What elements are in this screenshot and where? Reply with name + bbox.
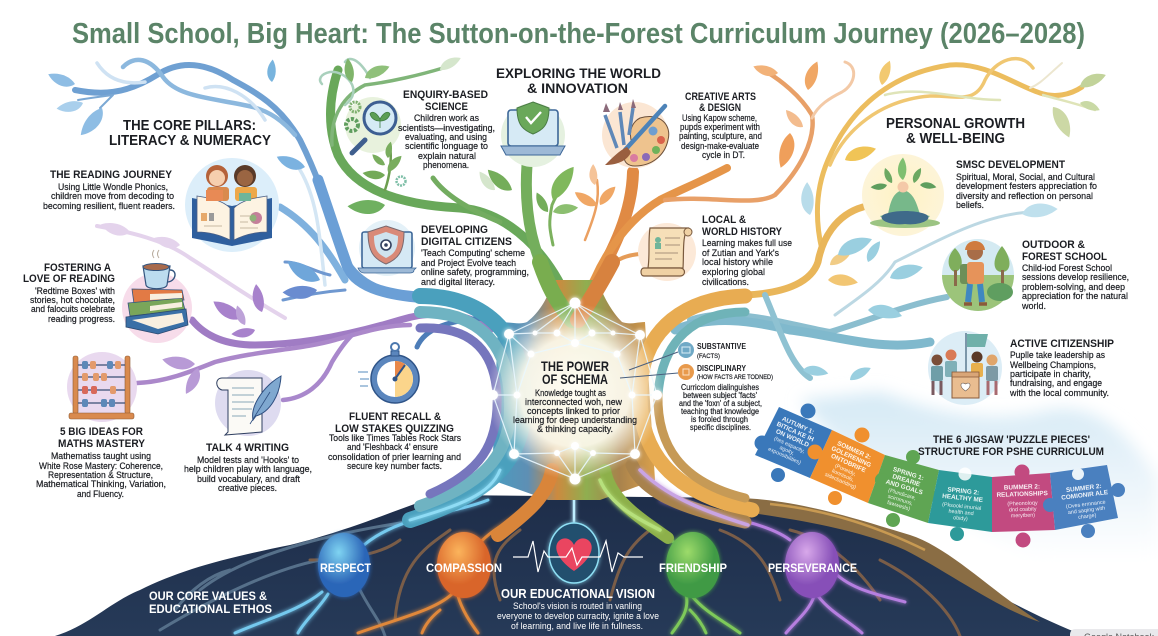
enquiry-based science text: scientific longuage to [405, 141, 488, 151]
puzzle piece 1: exponsibilities) [767, 446, 802, 466]
value: perseverance [768, 532, 857, 598]
icon: palette and brushes [602, 99, 669, 168]
personal growth heading: & WELL-BEING [906, 130, 1005, 147]
puzzle piece 5: BUMMER 2: [1004, 483, 1040, 492]
personal growth heading: PERSONAL GROWTH [886, 115, 1025, 132]
puzzle piece 5: dnd coabity [1009, 506, 1037, 513]
puzzle piece 4 [928, 468, 1007, 541]
puzzle piece 6 [1043, 465, 1125, 538]
active citizenship text: with the local community. [1009, 388, 1109, 398]
puzzle piece 1: ON WORLD [775, 428, 810, 449]
creative arts text: CREATIVE ARTS [685, 91, 756, 103]
talk 4 writing text: build vocabulary, and draft [197, 474, 300, 484]
puzzle piece 2 [808, 428, 889, 505]
schema text: Knowledge tought as [535, 388, 606, 398]
schema text: interconnected woh, new [525, 397, 622, 407]
fluent recall text: secure key number facts. [347, 461, 442, 471]
enquiry-based science text: Children work as [414, 113, 479, 123]
fluent recall text [328, 411, 461, 471]
creative arts text: Using Kapow scheme, [682, 113, 757, 123]
local and world history text [702, 214, 792, 287]
fluent recall text: consolidation of prier learning and [328, 452, 461, 462]
fluent recall text: Tools like Times Tables Rock Stars [329, 433, 461, 443]
fluent recall text: LOW STAKES QUIZZING [335, 423, 454, 435]
puzzle piece 6: charge) [1078, 513, 1097, 521]
branch: purple reading and writing [97, 220, 490, 400]
schema text: concepts linked to prior [527, 406, 620, 416]
enquiry-based science text: evaluating, and using [405, 132, 487, 142]
branch: green science and computing [320, 53, 579, 305]
knowledge types callout: and the 'foxn' of a subject, [679, 399, 762, 408]
icon: scroll and quill [215, 370, 281, 436]
icon: history scroll [638, 223, 696, 281]
puzzle piece 1: AUTUMY 1: [781, 416, 815, 436]
enquiry-based science text: SCIENCE [425, 101, 468, 113]
value: friendship [659, 532, 727, 598]
puzzle piece 5: (Pheonoloqy [1007, 500, 1038, 508]
puzzle piece 5: merytben) [1011, 513, 1035, 519]
schema text: OF SCHEMA [542, 371, 608, 387]
educational vision text: everyone to develop curracity, ignite a love [497, 611, 659, 621]
creative arts text [679, 91, 762, 160]
trunk [410, 262, 752, 538]
big ideas for maths text: Representation & Structure, [48, 470, 153, 480]
knowledge types callout: teaching that knowledge [681, 407, 759, 416]
active citizenship text: fundraising, and engage [1010, 378, 1102, 388]
active citizenship text: Puplle take leadership as [1010, 350, 1105, 360]
core values heading: EDUCATIONAL ETHOS [149, 602, 272, 616]
puzzle piece 2: (Poneidy, [834, 463, 857, 478]
outdoor forest school text: OUTDOOR & [1022, 239, 1085, 251]
puzzle piece 6: (Oves ermnance [1066, 499, 1106, 510]
talk 4 writing text [184, 442, 312, 493]
big ideas for maths text: White Rose Mastery: Coherence, [39, 461, 163, 471]
fostering a love of reading text: FOSTERING A [44, 262, 111, 274]
creative arts text: pupds experiment with [680, 122, 760, 132]
icon: meditating figure [862, 154, 944, 236]
puzzle piece 4: HEALTHY ME [942, 493, 984, 504]
educational vision text: of learning, and live life in fullness. [511, 621, 643, 631]
jigsaw heading [918, 434, 1104, 458]
puzzle piece 3: fawwesls) [886, 500, 911, 513]
puzzle piece 4: obidy) [953, 515, 968, 523]
active citizenship text: ACTIVE CITIZENSHIP [1010, 338, 1114, 350]
digital citizens text [421, 224, 529, 287]
icon: children with flag and box [928, 331, 1002, 405]
value: compassion [426, 532, 502, 598]
big ideas for maths text [36, 426, 166, 499]
value: respect: RESPECT [320, 561, 372, 575]
big ideas for maths text: MATHS MASTERY [58, 438, 146, 450]
knowledge types callout: (FACTS) [697, 353, 720, 360]
puzzle piece 3: (Plundicare, [887, 488, 917, 502]
icon: laptop with shield [501, 102, 565, 167]
reading journey text: Using Little Wondle Phonics, [58, 182, 168, 192]
fostering a love of reading text: 'Redtime Boxes' with [35, 286, 115, 296]
puzzle piece 1: agoity, [778, 445, 795, 457]
puzzle piece 1: (hes eapacity, [773, 436, 806, 455]
puzzle piece 3: SPRING 1: [892, 466, 925, 482]
knowledge types callout: DISCIPLINARY [697, 364, 747, 373]
big ideas for maths text: Mathematical Thinking, Variation, [36, 479, 166, 489]
jigsaw heading: STRUCTURE FOR PSHE CURRICULUM [918, 446, 1104, 458]
schema text: THE POWER [541, 358, 609, 374]
creative arts text: cycle in DT. [702, 150, 745, 160]
icon: magnifier with plant [345, 97, 406, 186]
puzzle piece 5: RELATIONSHIPS [996, 490, 1049, 499]
talk 4 writing text: creative pieces. [218, 483, 277, 493]
fostering a love of reading text: LOVE OF READING [23, 273, 115, 285]
puzzle piece 2: ONTOBRIFE [830, 453, 867, 475]
creative arts text: design-make-evaluate [681, 141, 759, 151]
educational vision text: OUR EDUCATIONAL VISION [501, 586, 655, 601]
fostering a love of reading text: reading progress. [48, 314, 115, 324]
digital citizens text: DEVELOPING [421, 224, 488, 236]
value: perseverance: PERSEVERANCE [768, 561, 857, 575]
big ideas for maths text: Mathematiss taught using [51, 451, 151, 461]
icon: cup and book stack [122, 250, 192, 343]
smsc development text: beliefs. [956, 200, 984, 210]
talk 4 writing text: Model tests and 'Hooks' to [197, 455, 299, 465]
value: compassion: COMPASSION [426, 561, 502, 575]
core pillars heading [109, 117, 271, 149]
branch: orange arts and history [572, 59, 854, 305]
enquiry-based science text [398, 89, 495, 170]
core values heading: OUR CORE VALUES & [149, 589, 267, 603]
big ideas for maths text: and Fluency. [77, 489, 124, 499]
local and world history text: Learning makes full use [702, 238, 792, 248]
smsc development text: SMSC DEVELOPMENT [956, 159, 1065, 171]
outdoor forest school text: appreciation for the natural [1022, 291, 1128, 301]
puzzle piece 4: SPRING 2: [947, 486, 980, 497]
exploring the world heading [496, 65, 661, 96]
talk 4 writing text: help children play with language, [184, 464, 312, 474]
educational vision text: School's vision is routed in vanling [513, 601, 642, 611]
local and world history text: WORLD HISTORY [702, 226, 783, 238]
jigsaw heading: THE 6 JIGSAW 'PUZZLE PIECES' [933, 434, 1090, 446]
digital citizens text: DIGITAL CITIZENS [421, 236, 512, 248]
local and world history text: local history while [702, 257, 773, 267]
digital citizens text: 'Teach Computing' scheme [421, 248, 525, 258]
puzzle piece 1 [754, 404, 832, 482]
core pillars heading: LITERACY & NUMERACY [109, 132, 271, 149]
value: respect [318, 533, 372, 597]
enquiry-based science text: explain natural [418, 151, 476, 161]
fluent recall text: and 'Fleshback 4' ensure [347, 442, 438, 452]
branch: stopwatch link [417, 318, 485, 347]
creative arts text: & DESIGN [699, 102, 741, 114]
icon: heartbeat heart [513, 523, 643, 583]
local and world history text: LOCAL & [702, 214, 746, 226]
icon: child hiking in forest [942, 239, 1014, 311]
knowledge types callout [620, 342, 773, 432]
puzzle piece 3: AND GOALS [885, 479, 924, 497]
reading journey text: THE READING JOURNEY [50, 169, 173, 181]
puzzle piece 6: SUMMER 2: [1066, 483, 1102, 494]
fostering a love of reading text [23, 262, 115, 324]
schema text: & thinking capacity. [537, 424, 613, 434]
digital citizens text: online safety, programming, [421, 267, 529, 277]
ground and roots [55, 485, 1085, 636]
enquiry-based science text: ENQUIRY-BASED [403, 89, 488, 101]
sky wash behind puzzle [800, 392, 1158, 560]
outdoor forest school text: problem-solving, and deep [1022, 282, 1125, 292]
smsc development text: Spiritual, Moral, Social, and Cultural [956, 172, 1095, 182]
core pillars heading: THE CORE PILLARS: [123, 117, 256, 134]
fostering a love of reading text: stories, hot chocolate, [30, 295, 115, 305]
branch: gold personal growth [745, 59, 1108, 295]
local and world history text: of Zutian and Yark's [702, 248, 779, 258]
puzzle piece 3: DREARIE [891, 473, 922, 489]
puzzle piece 2: lionnisols, [831, 468, 855, 484]
icon: laptop with lock shield [358, 220, 416, 276]
knowledge types callout: specific disciplines. [690, 423, 751, 432]
schema network [487, 298, 663, 484]
branch: blue literacy and numeracy [46, 59, 430, 300]
icon: abacus [67, 352, 137, 422]
enquiry-based science text: phenomena. [423, 160, 469, 170]
puzzle piece 2: sidecbarlding) [824, 472, 857, 491]
smsc development text: development festers appreciation fo [956, 181, 1097, 191]
knowledge types callout: Curricclom dialinguishes [681, 383, 759, 392]
schema text [513, 358, 637, 434]
outdoor forest school text: FOREST SCHOOL [1022, 251, 1107, 263]
digital citizens text: and Project Evolve teach [421, 258, 516, 268]
value: friendship: FRIENDSHIP [659, 561, 727, 575]
enquiry-based science text: scientists—investigating, [398, 123, 495, 133]
exploring the world heading: EXPLORING THE WORLD [496, 65, 661, 81]
knowledge types callout: SUBSTANTIVE [697, 342, 747, 351]
talk 4 writing text: TALK 4 WRITING [206, 442, 289, 454]
knowledge types callout: (HOW FACTS ARE TODNED) [697, 374, 773, 381]
schema text: learning for deep understanding [513, 415, 637, 425]
puzzle piece 5 [992, 464, 1055, 548]
smsc development text [956, 159, 1097, 210]
creative arts text: painting, sculpture, and [679, 131, 762, 141]
icon: stopwatch [358, 343, 419, 403]
local and world history text: exploring global [702, 267, 765, 277]
puzzle piece 6: COMIONIR ALE [1061, 489, 1109, 502]
puzzle piece 3: scirnmuns, [887, 494, 914, 507]
active citizenship text [1009, 338, 1114, 398]
branch: teal outdoor and citizenship [675, 182, 1058, 383]
personal growth heading [886, 115, 1025, 147]
outdoor forest school text: Child-iod Forest School [1022, 263, 1112, 273]
core values heading [149, 589, 272, 616]
knowledge types callout: is foroled through [691, 415, 748, 424]
puzzle piece 2: SOMMER 2: [836, 440, 872, 461]
local and world history text: civilications. [702, 277, 749, 287]
puzzle piece 4: (Pksookl imunial [942, 502, 981, 512]
active citizenship text: Wellbeing Champions, [1010, 360, 1096, 370]
outdoor forest school text [1021, 239, 1129, 311]
reading journey text: children move from decoding to [51, 191, 174, 201]
puzzle piece 4: health and [948, 509, 974, 517]
jigsaw puzzle pieces [754, 404, 1125, 548]
educational vision text [497, 586, 659, 631]
digital citizens text: and digital literacy. [421, 277, 495, 287]
reading journey text [43, 169, 175, 211]
fluent recall text: FLUENT RECALL & [349, 411, 441, 423]
fostering a love of reading text: and falocuits celebrate [31, 304, 115, 314]
watermark badge [1070, 629, 1158, 636]
exploring the world heading: & INNOVATION [527, 80, 628, 96]
puzzle piece 1: BITICA KE IH [775, 421, 815, 444]
icon: children reading book [185, 158, 279, 252]
outdoor forest school text: world. [1021, 301, 1046, 311]
puzzle piece 6: and saqing with [1068, 506, 1106, 516]
active citizenship text: participate in charity, [1010, 369, 1091, 379]
outdoor forest school text: sessions develop resilience, [1022, 272, 1129, 282]
reading journey text: becoming resilient, fluent readers. [43, 201, 175, 211]
smsc development text: diversity and reflection on personal [956, 191, 1093, 201]
puzzle piece 2: GOLERENING [830, 445, 872, 469]
knowledge types callout: between subject 'facts' [683, 391, 757, 400]
big ideas for maths text: 5 BIG IDEAS FOR [60, 426, 143, 438]
puzzle piece 3 [868, 450, 945, 527]
